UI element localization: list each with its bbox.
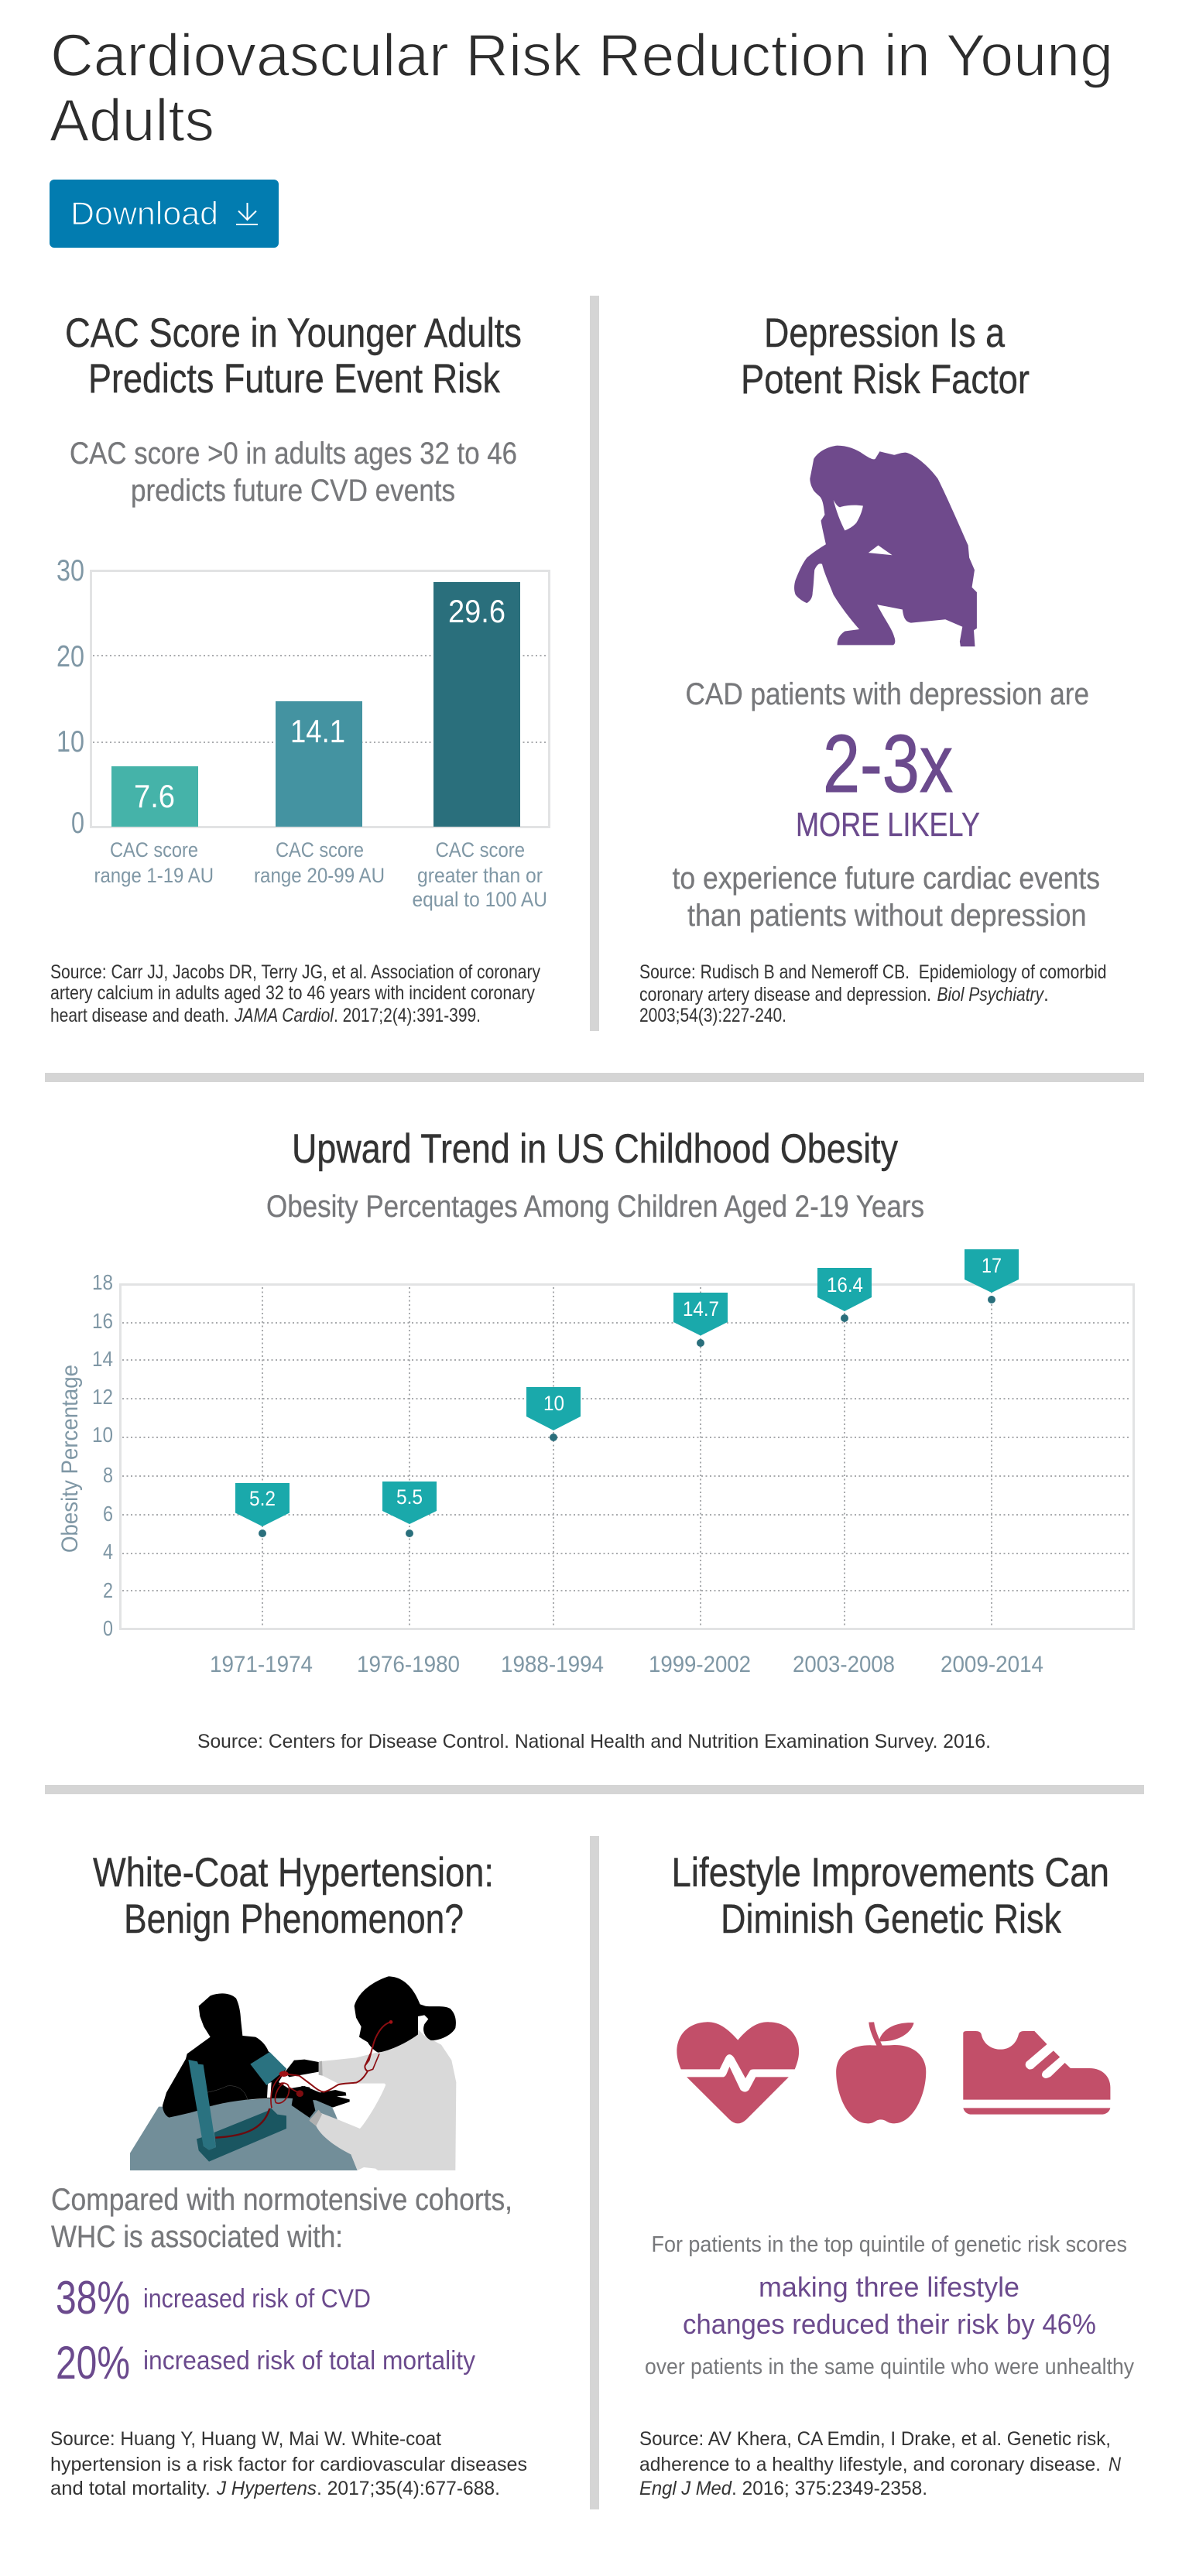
text: CAC subtitle: CAC score >0 in adults ages 32 to 46 (70, 437, 517, 471)
heading: CAC score (65, 310, 522, 402)
point chart: obesity percentages (57, 1249, 1133, 1677)
category labels: CAC score (276, 838, 364, 862)
x axis labels: 2009-2014 (941, 1652, 1043, 1677)
text: CAC subtitle (70, 437, 517, 508)
heading: lifestyle (672, 1850, 1109, 1942)
y axis labels (92, 1270, 113, 1640)
source: Khera: adherence to a healthy lifestyle, and coronary disease. (639, 2454, 1101, 2475)
callout: reduced risk by 46 percent: changes reduced their risk by 46% (683, 2308, 1096, 2340)
source: Carr: Source: Carr JJ, Jacobs DR, Terry JG, et al. Association of coronary (50, 961, 540, 983)
point: 5.5: 5.5 (396, 1485, 423, 1509)
y axis labels: 8 (103, 1463, 113, 1487)
icon: heart with pulse (677, 2022, 799, 2123)
y axis labels: 20 (57, 640, 84, 673)
horizontal divider: upper (45, 1073, 1144, 1082)
source: Huang: . 2017;35(4):677-688. (317, 2478, 500, 2499)
heading: lifestyle: Diminish Genetic Risk (721, 1896, 1061, 1942)
y axis labels: 18 (92, 1270, 113, 1294)
source: Carr: artery calcium in adults aged 32 to 46 years with incident coronary (50, 982, 535, 1004)
point: 10 (526, 1387, 581, 1441)
heading: white-coat: White-Coat Hypertension: (93, 1850, 494, 1896)
heading: obesity: Upward Trend in US Childhood Obesity (292, 1126, 898, 1172)
source: Khera (639, 2428, 1122, 2499)
title: Cardiovascular Risk Reduction in Young (50, 22, 1113, 89)
point: 5.2: 5.2 (249, 1487, 276, 1510)
icon: download arrow (236, 203, 258, 224)
y axis labels: 0 (71, 807, 84, 840)
category labels: equal to 100 AU (412, 888, 547, 911)
source: Carr: . 2017;2(4):391-399. (334, 1005, 481, 1026)
text: compared with normotensive cohorts: WHC is associated with: (51, 2220, 343, 2254)
callout: reduced risk by 46 percent (683, 2271, 1096, 2340)
icon: apple (836, 2022, 926, 2123)
title (50, 22, 1113, 154)
text: future cardiac events (672, 862, 1100, 933)
stat: 2-3x: 2-3x (823, 718, 953, 810)
stat: 20 percent mortality: 20% (56, 2337, 130, 2389)
heading: depression: Depression Is a (764, 310, 1005, 356)
category labels: CAC score (435, 838, 525, 862)
source: Khera: Source: AV Khera, CA Emdin, I Drake, et al. Genetic risk, (639, 2428, 1111, 2450)
y axis labels: 12 (92, 1385, 113, 1409)
text: same quintile: over patients in the same quintile who were unhealthy (645, 2355, 1134, 2379)
source: Rudisch: 2003;54(3):227-240. (639, 1005, 786, 1026)
category labels: greater than or (417, 864, 543, 887)
source: Rudisch (639, 961, 1107, 1026)
text: CAD patients: CAD patients with depression are (686, 677, 1089, 711)
heading: CAC score: CAC Score in Younger Adults (65, 310, 522, 356)
y axis labels: 14 (92, 1347, 113, 1371)
x axis labels: 1999-2002 (649, 1652, 751, 1677)
y axis title: Obesity Percentage (57, 1365, 83, 1553)
y axis labels: 4 (103, 1540, 113, 1564)
source: Khera: Engl J Med (639, 2478, 732, 2499)
text: future cardiac events: than patients without depression (687, 899, 1087, 933)
source: Rudisch: Source: Rudisch B and Nemeroff CB. Epidemiology of comorbid (639, 961, 1107, 983)
callout: reduced risk by 46 percent: making three lifestyle (759, 2271, 1019, 2303)
icon: shoe (963, 2031, 1110, 2115)
source: Khera: N (1108, 2454, 1122, 2475)
source: Khera: . 2016; 375:2349-2358. (732, 2478, 927, 2499)
source: Rudisch: Biol Psychiatry (937, 984, 1044, 1005)
y axis labels: 10 (92, 1423, 113, 1447)
heading: white-coat: Benign Phenomenon? (124, 1896, 464, 1942)
source: Huang (50, 2428, 527, 2499)
y axis labels: 30 (57, 554, 84, 587)
y axis labels: 6 (103, 1502, 113, 1526)
heading: white-coat (93, 1850, 494, 1942)
category labels: CAC score (110, 838, 198, 862)
point: 16.4: 16.4 (827, 1273, 863, 1297)
stat: 38 percent CVD (56, 2272, 371, 2324)
y axis labels: 2 (103, 1578, 113, 1602)
panel: CAC score (50, 310, 550, 1026)
vertical divider: bottom row (590, 1836, 599, 2509)
x axis labels: 1976-1980 (357, 1652, 460, 1677)
panel: childhood obesity (57, 1126, 1133, 1752)
heading: depression: Potent Risk Factor (741, 357, 1030, 402)
heading: CAC score: Predicts Future Event Risk (88, 356, 500, 402)
icons: heart, apple, shoe (677, 2022, 1110, 2123)
vertical divider: top row (590, 296, 599, 1031)
point: 5.2 (235, 1483, 290, 1537)
horizontal divider: lower (45, 1785, 1144, 1794)
y axis labels: 0 (103, 1616, 113, 1640)
source: Rudisch: . (1043, 984, 1049, 1005)
stat label: more likely: MORE LIKELY (796, 806, 980, 844)
source: Carr: heart disease and death. (50, 1005, 229, 1026)
category labels (94, 838, 547, 911)
panel: white-coat hypertension (50, 1850, 527, 2499)
x axis labels: 1971-1974 (210, 1652, 313, 1677)
download button (50, 180, 279, 248)
stat: 38 percent CVD: 38% (56, 2272, 130, 2324)
panel: depression (639, 310, 1107, 1026)
text: compared with normotensive cohorts: Compared with normotensive cohorts, (51, 2183, 512, 2217)
text: CAC subtitle: predicts future CVD events (131, 474, 455, 508)
bar: 14.1: 14.1 (290, 713, 345, 749)
point: 17 (965, 1249, 1019, 1303)
title: Adults (50, 87, 214, 154)
y axis labels (57, 554, 84, 840)
bar: 29.6 (433, 582, 520, 827)
category labels: range 20-99 AU (254, 864, 385, 887)
point: 17: 17 (982, 1254, 1002, 1277)
text: compared with normotensive cohorts (51, 2183, 512, 2254)
illustration: doctor measuring patient's blood pressure (130, 1976, 456, 2170)
x axis labels (210, 1652, 1043, 1677)
bar: 14.1 (276, 701, 362, 827)
heading: depression (741, 310, 1030, 402)
source: Huang: Source: Huang Y, Huang W, Mai W. White-coat (50, 2428, 441, 2450)
stat: 38 percent CVD: increased risk of CVD (143, 2284, 371, 2314)
bar: 29.6: 29.6 (448, 593, 505, 629)
bar: 7.6: 7.6 (134, 778, 175, 814)
bar chart: CAC event risk (57, 554, 550, 911)
category labels: range 1-19 AU (94, 864, 214, 887)
point: 14.7 (673, 1293, 728, 1347)
y axis labels: 16 (92, 1309, 113, 1333)
y axis labels: 10 (57, 725, 84, 759)
heading: lifestyle: Lifestyle Improvements Can (672, 1850, 1109, 1896)
point: 5.5 (382, 1482, 437, 1537)
source: Huang: and total mortality. (50, 2478, 211, 2499)
source: Huang: hypertension is a risk factor for cardiovascular diseases (50, 2454, 527, 2475)
source: Rudisch: coronary artery disease and depression. (639, 984, 931, 1005)
source: Carr: JAMA Cardiol (234, 1005, 334, 1026)
point: 16.4 (817, 1268, 872, 1322)
x axis labels: 2003-2008 (793, 1652, 895, 1677)
icon: depressed person silhouette (794, 446, 977, 646)
bar: 7.6 (111, 766, 198, 827)
download button: Download (70, 195, 218, 231)
panel: lifestyle (639, 1850, 1134, 2499)
source: Huang: J Hypertens (216, 2478, 317, 2499)
text: top quintile: For patients in the top quintile of genetic risk scores (652, 2232, 1127, 2257)
stat: 20 percent mortality (56, 2337, 475, 2389)
point: 10: 10 (543, 1392, 564, 1415)
text: obesity subtitle: Obesity Percentages Among Children Aged 2-19 Years (266, 1190, 924, 1224)
source: Carr (50, 961, 540, 1026)
x axis labels: 1988-1994 (501, 1652, 604, 1677)
stat: 20 percent mortality: increased risk of total mortality (143, 2346, 475, 2376)
point: 14.7: 14.7 (683, 1297, 719, 1321)
text: future cardiac events: to experience future cardiac events (672, 862, 1100, 896)
source: CDC: Source: Centers for Disease Control. National Health and Nutrition Examination Survey. 2016. (197, 1731, 991, 1752)
